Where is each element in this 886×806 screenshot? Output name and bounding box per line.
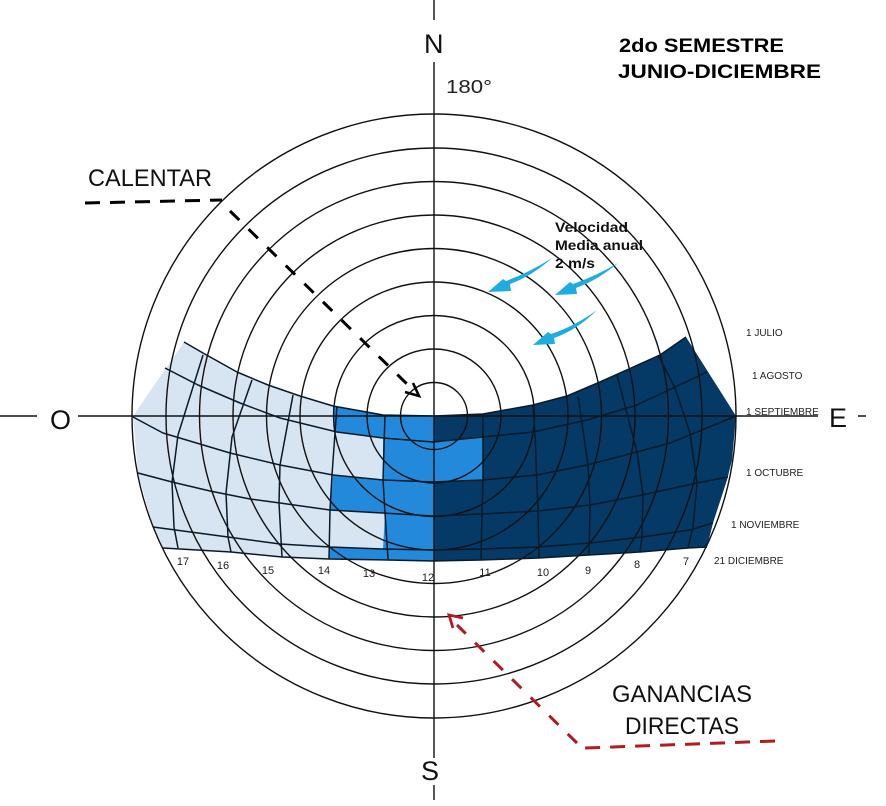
callout: calentar xyxy=(85,165,419,396)
heading: compass E: E xyxy=(829,403,847,433)
hour labels: 14 xyxy=(318,565,330,577)
zone: dark blue east xyxy=(434,337,736,561)
callout: ganancias directas: GANANCIAS xyxy=(612,681,752,708)
wind annotation xyxy=(488,219,643,345)
title xyxy=(618,35,821,83)
hour labels: 8 xyxy=(634,559,640,571)
hour labels: 13 xyxy=(363,568,375,580)
chart: date curves xyxy=(133,337,736,561)
callout: ganancias directas: DIRECTAS xyxy=(625,713,739,740)
hour labels xyxy=(177,556,689,584)
chart: hour lines xyxy=(172,355,697,559)
arrow head: black xyxy=(405,383,419,396)
callout: ganancias directas xyxy=(449,615,775,748)
chart: concentric altitude circles xyxy=(132,114,736,718)
date labels: 1 NOVIEMBRE xyxy=(731,520,800,531)
callout: calentar: CALENTAR xyxy=(88,165,212,192)
heading: compass S: S xyxy=(421,756,439,786)
wind annotation: Velocidad xyxy=(555,219,628,235)
heading: compass O: O xyxy=(50,405,71,435)
zone: medium blue east xyxy=(434,437,483,482)
hour labels: 17 xyxy=(177,556,189,568)
hour labels: 11 xyxy=(479,567,491,579)
hour labels: 16 xyxy=(217,560,229,572)
hour labels: 12 xyxy=(422,572,434,584)
heading: compass N: N xyxy=(424,29,444,59)
chart: shaded sun-hour zones xyxy=(133,337,736,561)
icon: wind arrow 1 xyxy=(488,258,552,292)
date labels xyxy=(714,328,819,567)
zone: medium blue xyxy=(329,406,434,561)
date labels: 1 AGOSTO xyxy=(752,371,803,382)
wind annotation: Media anual xyxy=(555,237,643,253)
icon: wind arrow 3 xyxy=(533,310,597,345)
hour labels: 10 xyxy=(537,567,549,579)
icon: wind arrow 2 xyxy=(555,263,618,295)
date labels: 1 SEPTIEMBRE xyxy=(746,407,819,418)
arrow head: red xyxy=(449,615,463,628)
date labels: 1 OCTUBRE xyxy=(746,468,804,479)
title: 2do SEMESTRE xyxy=(619,35,784,57)
date labels: 1 JULIO xyxy=(746,328,783,339)
hour labels: 15 xyxy=(262,565,274,577)
title: JUNIO-DICIEMBRE xyxy=(618,61,821,83)
hour labels: 7 xyxy=(683,556,689,568)
date labels: 21 DICIEMBRE xyxy=(714,556,784,567)
wind annotation: 2 m/s xyxy=(555,255,595,271)
zone: light blue west xyxy=(133,342,434,560)
label: 180 degrees: 180° xyxy=(446,77,492,97)
hour labels: 9 xyxy=(585,565,591,577)
